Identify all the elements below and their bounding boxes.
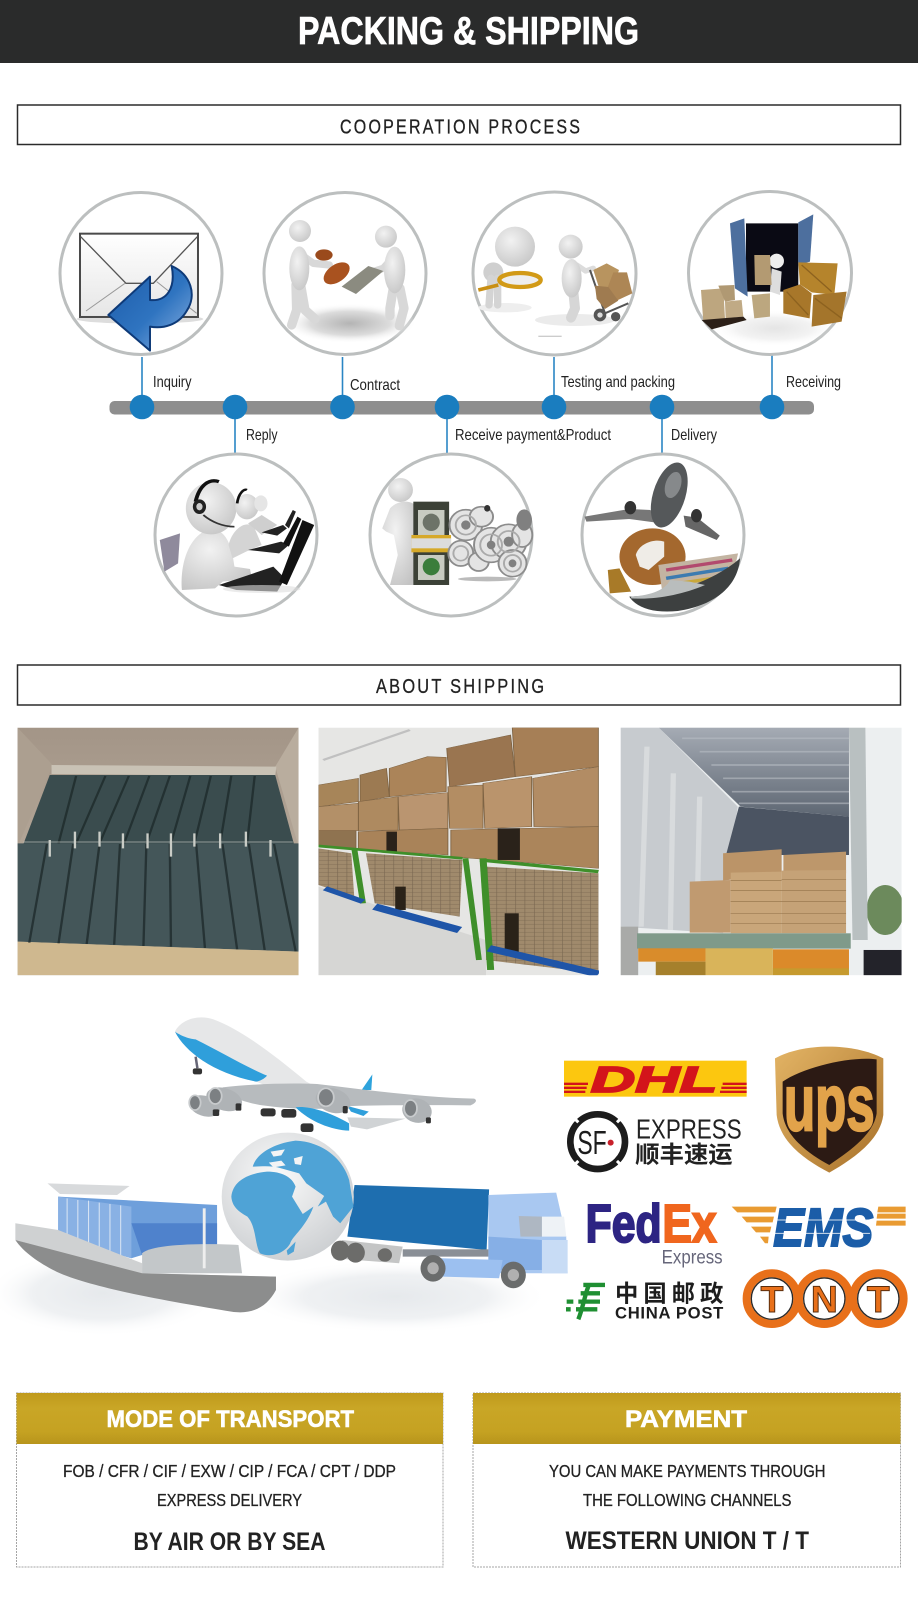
- logo: EMS: EMS: [773, 1198, 873, 1258]
- section heading: cooperation process: [18, 105, 900, 144]
- timeline labels: Contract: [350, 377, 400, 394]
- title: PACKING & SHIPPING: [298, 10, 639, 53]
- icon: delivery plane, globe and ship: [582, 454, 744, 616]
- icon: payment figure, banknotes and gears: [370, 454, 532, 616]
- logo: FedEx Express: Ex: [662, 1195, 717, 1254]
- connectors: [142, 355, 772, 453]
- water reflection: [0, 1250, 549, 1337]
- timeline labels: Inquiry: [153, 374, 192, 391]
- payment intro: YOU CAN MAKE PAYMENTS THROUGH: [549, 1461, 826, 1481]
- delivery line: EXPRESS DELIVERY: [157, 1490, 302, 1510]
- hero: plane, globe, ship and truck illustration: [0, 1017, 568, 1337]
- logo: China Post: CHINA POST: [615, 1303, 723, 1322]
- globe: [222, 1133, 354, 1261]
- panel header band: [16, 1393, 443, 1444]
- timeline labels: Receiving: [786, 374, 841, 391]
- plane: [175, 1017, 476, 1132]
- section heading: about shipping: ABOUT SHIPPING: [376, 674, 544, 697]
- panel: payment: [473, 1393, 900, 1567]
- timeline bar: [110, 401, 814, 414]
- timeline labels: [153, 374, 841, 444]
- timeline labels: Reply: [246, 427, 278, 444]
- logo: DHL: [564, 1059, 747, 1100]
- photo: stacked cartons on pallets: [319, 728, 599, 975]
- icon: receiving container and crates: [688, 192, 852, 354]
- payment methods: WESTERN UNION T / T: [566, 1527, 809, 1555]
- transport emphasis: BY AIR OR BY SEA: [134, 1528, 326, 1556]
- logo: EMS: [732, 1198, 906, 1258]
- timeline labels: Receive payment&Product: [455, 427, 611, 444]
- panel header band: [473, 1393, 900, 1444]
- icon: testing with magnifier and hand truck: [473, 192, 636, 355]
- carrier logos: [564, 1047, 906, 1324]
- timeline dots: [130, 395, 784, 419]
- logo: TNT: T: [761, 1278, 784, 1320]
- truck: [331, 1185, 568, 1288]
- panel: mode of transport: [16, 1393, 443, 1567]
- icon: inquiry envelope with reply arrow: [60, 192, 222, 354]
- logo: UPS shield: [775, 1047, 883, 1173]
- section heading: about shipping: [18, 665, 900, 705]
- icon: contract figures with stamp: [264, 192, 426, 354]
- incoterms: FOB / CFR / CIF / EXW / CIP / FCA / CPT / DDP: [63, 1461, 396, 1481]
- icon: reply call-centre agents: [155, 454, 317, 616]
- photo: packed products in carton: [18, 728, 299, 975]
- logo: SF Express: SF: [577, 1125, 607, 1162]
- panel heading: PAYMENT: [625, 1406, 747, 1433]
- logo: SF Express: [570, 1113, 742, 1169]
- logo: SF Express: 顺丰速运: [635, 1141, 733, 1167]
- logo: China Post: [566, 1281, 723, 1322]
- ship: [15, 1183, 276, 1312]
- payment intro line two: THE FOLLOWING CHANNELS: [583, 1490, 792, 1510]
- logo: TNT: T: [867, 1278, 890, 1320]
- logo: China Post: 中国邮政: [615, 1281, 723, 1307]
- logo: DHL: DHL: [591, 1059, 717, 1100]
- photo: loaded shipping container on truck: [621, 728, 904, 975]
- logo: FedEx Express: [586, 1195, 723, 1268]
- logo: TNT: N: [811, 1278, 838, 1320]
- timeline labels: Delivery: [671, 427, 717, 444]
- logo: FedEx Express: Fed: [586, 1195, 662, 1254]
- logo: FedEx Express: Express: [662, 1247, 723, 1268]
- panel heading: MODE OF TRANSPORT: [106, 1406, 354, 1433]
- timeline labels: Testing and packing: [561, 374, 675, 391]
- logo: TNT: [747, 1273, 904, 1324]
- logo: SF Express: EXPRESS: [636, 1113, 742, 1144]
- process timeline: [110, 355, 841, 453]
- section heading: cooperation process: COOPERATION PROCESS: [340, 116, 580, 138]
- header banner: [0, 0, 918, 63]
